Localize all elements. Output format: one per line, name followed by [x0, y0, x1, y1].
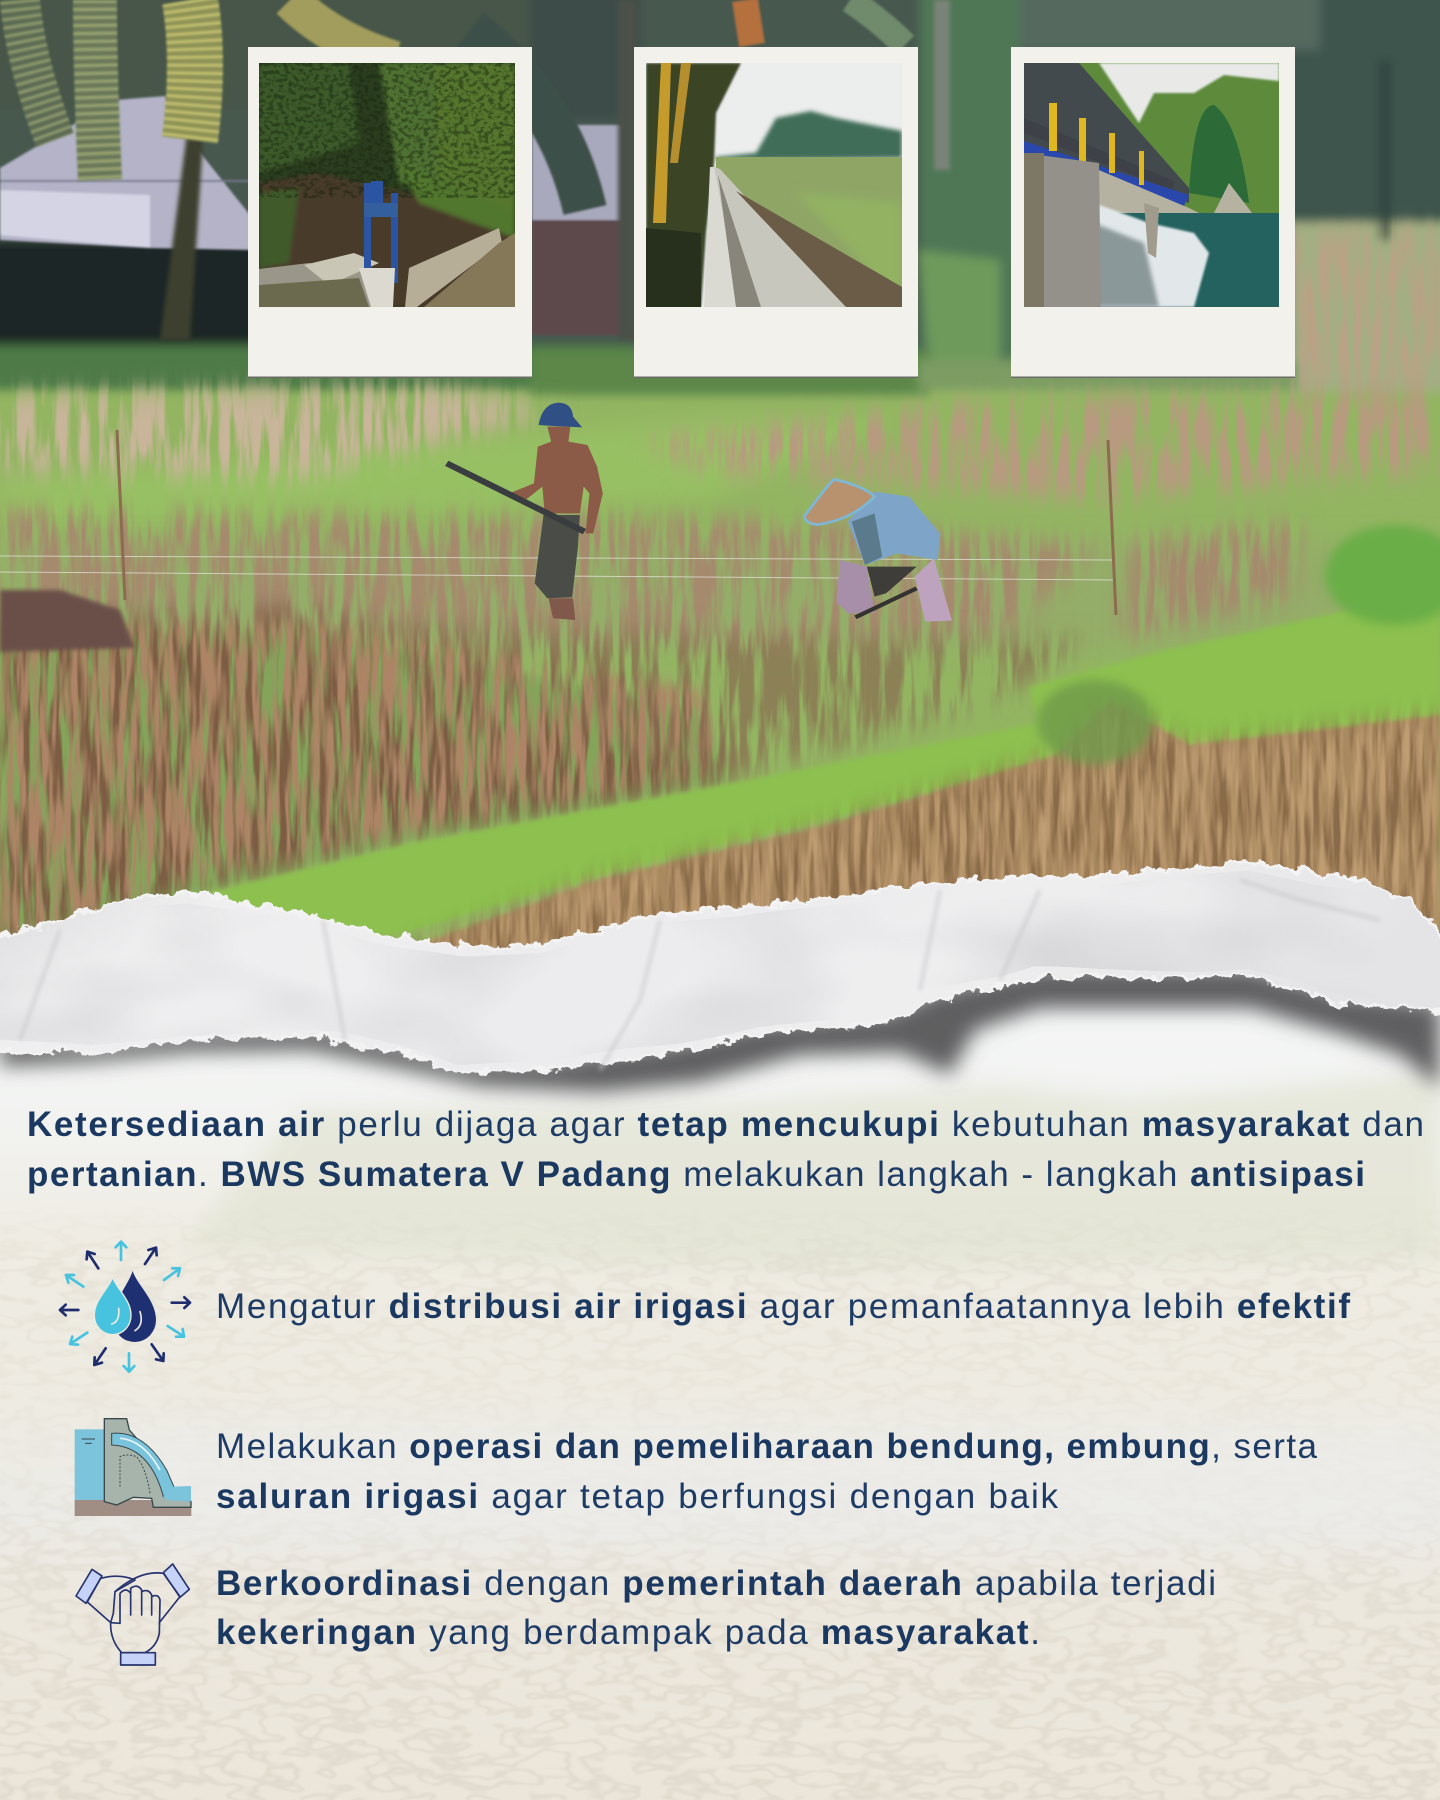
- farmer with conical hat: [804, 479, 952, 622]
- step 1 text: Mengatur distribusi air irigasi agar pemanfaatannya lebih efektif: [216, 1287, 1350, 1326]
- icon: water drops with arrows: [60, 1242, 190, 1372]
- dry rice patches, upper field: [0, 230, 1440, 650]
- step 3: coordination: [76, 1564, 1216, 1665]
- farmer with hoe: [447, 403, 603, 620]
- dry rice stalks, left highlights: [0, 620, 720, 950]
- dry rice stalks, left: [0, 610, 1090, 950]
- polaroid 2: concrete canal: [634, 47, 918, 378]
- photo: irrigation gate: [259, 63, 515, 307]
- step 3 text line 1: Berkoordinasi dengan pemerintah daerah apabila terjadi: [216, 1564, 1216, 1603]
- step 2 text line 1: Melakukan operasi dan pemeliharaan bendung, embung, serta: [216, 1427, 1318, 1466]
- icon: dam spillway: [75, 1419, 191, 1516]
- fence wires: [0, 430, 1116, 615]
- pale haze band behind the steps: [120, 1430, 1440, 1540]
- dry rice right highlights: [421, 711, 1440, 949]
- lower background: faded cracked earth: [0, 975, 1440, 1800]
- step 3 text line 2: kekeringan yang berdampak pada masyarakat.: [216, 1613, 1040, 1652]
- house roofs: [0, 96, 624, 335]
- step 2: dam maintenance: [75, 1419, 1318, 1516]
- cracked ground texture: [0, 1200, 1440, 1800]
- green between dry rice, left: [0, 630, 730, 950]
- faded field silhouette: [180, 1070, 1440, 1270]
- palm trunks and fronds: [20, 0, 950, 340]
- green swoosh on terrace: [207, 590, 1440, 945]
- intro line 1: Ketersediaan air perlu dijaga agar tetap mencukupi kebutuhan masyarakat dan: [27, 1105, 1424, 1144]
- step 2 text line 2: saluran irigasi agar tetap berfungsi dengan baik: [216, 1477, 1058, 1516]
- paper creases: [20, 880, 1380, 1070]
- polaroid 3: dam with spillway: [1011, 47, 1295, 378]
- torn paper strip with shadow: [0, 862, 1440, 1092]
- paper sheet: [0, 862, 1440, 1072]
- polaroid 1: irrigation gate: [248, 47, 532, 378]
- paper crumple shading: [0, 870, 1440, 1064]
- photo: dam with spillway: [1024, 63, 1279, 307]
- dry rice right: [430, 704, 1440, 949]
- bush and foliage: [0, 525, 1440, 764]
- intro line 2: pertanian. BWS Sumatera V Padang melakukan langkah - langkah antisipasi: [27, 1155, 1365, 1194]
- photo: concrete canal: [646, 63, 902, 307]
- upper field tones: [8, 427, 836, 513]
- step 1: water distribution: [60, 1242, 1350, 1372]
- tree line and house backdrop: [0, 0, 1440, 395]
- icon: joined hands: [76, 1564, 189, 1665]
- dry rice right streaks: [412, 704, 1440, 948]
- intro paragraph: [27, 1105, 1424, 1194]
- background photo: farmers in a rice field: [0, 0, 1440, 985]
- paper shadow: [0, 967, 1440, 1092]
